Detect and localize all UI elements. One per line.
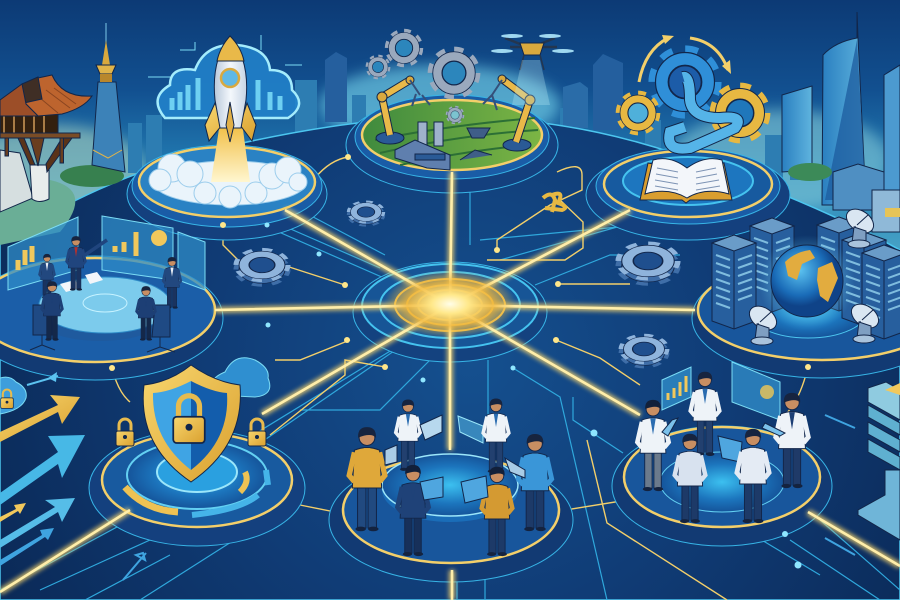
pagoda frame — [0, 114, 80, 172]
sky background — [0, 0, 900, 300]
illustration: industry gears and robots — [367, 31, 574, 170]
left robot arm — [376, 76, 430, 144]
platform: book — [586, 148, 790, 240]
shield inner right — [191, 381, 227, 470]
rocket fins — [205, 103, 256, 141]
stone wall — [0, 150, 33, 212]
smoke clouds — [149, 154, 307, 208]
pillar — [30, 165, 49, 202]
globe — [771, 245, 843, 317]
pointing man — [67, 236, 85, 291]
padlock — [173, 396, 205, 443]
blue gear — [653, 50, 717, 114]
book pages — [640, 163, 732, 203]
farm machines — [460, 128, 492, 160]
left gold gear — [619, 94, 657, 132]
landmark: right skyscrapers — [782, 12, 900, 232]
sky glow — [0, 65, 890, 215]
seated man front right — [137, 286, 155, 341]
central hub — [353, 262, 547, 362]
book lines — [655, 168, 720, 190]
seated woman left — [39, 254, 55, 299]
shield body — [143, 365, 240, 482]
drone — [491, 34, 574, 105]
roof — [24, 75, 92, 116]
cloud signal pins — [148, 35, 302, 77]
illustration: research team — [349, 398, 552, 556]
flame — [211, 122, 250, 182]
road and bushes — [0, 165, 124, 245]
hub glow — [384, 270, 516, 338]
circuit nodes — [109, 154, 811, 568]
holographic cloud — [158, 45, 299, 118]
shield inner left — [153, 381, 191, 470]
icon: growth arrows — [0, 372, 85, 566]
icon: floating gears — [237, 202, 676, 366]
cycle arrows — [639, 38, 728, 82]
illustration: gears, infinity loop and book — [619, 35, 766, 203]
rocket porthole — [221, 69, 239, 87]
landmark: pagoda — [0, 75, 124, 245]
cloud data bars — [172, 78, 280, 110]
landmark: tower — [92, 23, 125, 172]
chart panels — [662, 367, 691, 410]
rocket body — [214, 36, 247, 128]
icon: small arrows — [123, 415, 855, 580]
chairs — [33, 305, 170, 337]
icon: gold knot — [543, 194, 565, 212]
meeting table — [38, 295, 162, 341]
illustration: rocket launching from cloud — [148, 35, 307, 208]
right robot arm — [483, 75, 535, 151]
gears — [387, 31, 421, 65]
platform: scientists — [612, 426, 832, 546]
icon: cloud lock — [0, 377, 26, 414]
platform: boardroom — [0, 256, 223, 380]
seated man front left — [42, 281, 62, 341]
tablet hologram — [458, 416, 483, 443]
cloud behind shield — [212, 358, 270, 397]
platform: factory field — [346, 95, 558, 193]
illustration: boardroom — [8, 216, 205, 352]
seated woman right — [163, 257, 181, 309]
skyline: background buildings — [128, 52, 810, 180]
platform: data and globe — [692, 258, 900, 378]
glowing spokes — [0, 172, 900, 600]
traces: circuit lines — [0, 157, 900, 600]
dashboard panels — [8, 216, 205, 290]
illustration: server racks and globe — [712, 204, 900, 345]
platform: shield — [89, 430, 305, 546]
illustration: right office block — [858, 382, 900, 540]
rocket centre fin — [226, 102, 234, 142]
right gold gear — [714, 87, 766, 139]
illustration: scientists — [637, 362, 808, 523]
platform: rocket launch — [127, 145, 327, 240]
platform: team — [329, 454, 573, 582]
illustration: security shield — [116, 358, 270, 482]
rocket nose — [217, 36, 244, 61]
factory — [395, 122, 450, 170]
infinity ribbon — [669, 77, 738, 149]
